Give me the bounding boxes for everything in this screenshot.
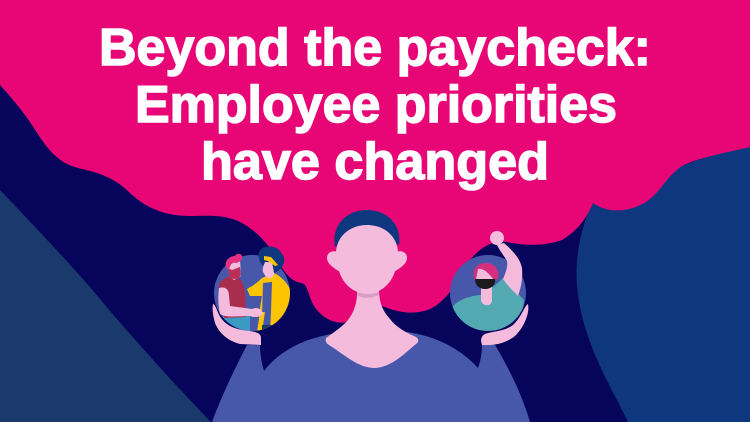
left circle: two people [214,247,292,333]
left ear [327,251,340,272]
right blue hill [577,140,750,422]
fist [490,231,504,245]
face [476,269,494,280]
title: have changed [201,133,549,191]
right hand [481,304,528,345]
title: Employee priorities [135,76,617,134]
man face [229,260,241,280]
man beard [228,267,241,279]
man shirt [219,276,246,318]
man jeans [222,316,250,331]
title: Beyond the paycheck: [99,19,651,77]
woman headband [264,256,278,266]
inner panel [250,282,272,332]
face [336,225,398,294]
left hand [213,304,261,345]
pink hair shape [0,0,750,323]
teal body [452,278,524,331]
left teal hill [0,190,211,422]
shirt [212,332,530,422]
yellow coat [247,273,292,332]
man arm [218,287,263,317]
hair [474,263,498,279]
right ear [394,251,407,272]
hair [334,210,399,247]
dark trousers [262,325,272,330]
neck shadow [357,292,379,298]
mask [475,279,495,289]
woman hair [259,247,284,273]
yellow strip [257,312,265,332]
right circle: person with mask [450,231,526,335]
raised arm [497,243,522,296]
woman face [263,262,274,278]
neck and chest [326,288,418,368]
title [99,19,651,191]
neck [481,286,492,305]
person [212,210,530,422]
man hair [226,254,242,270]
